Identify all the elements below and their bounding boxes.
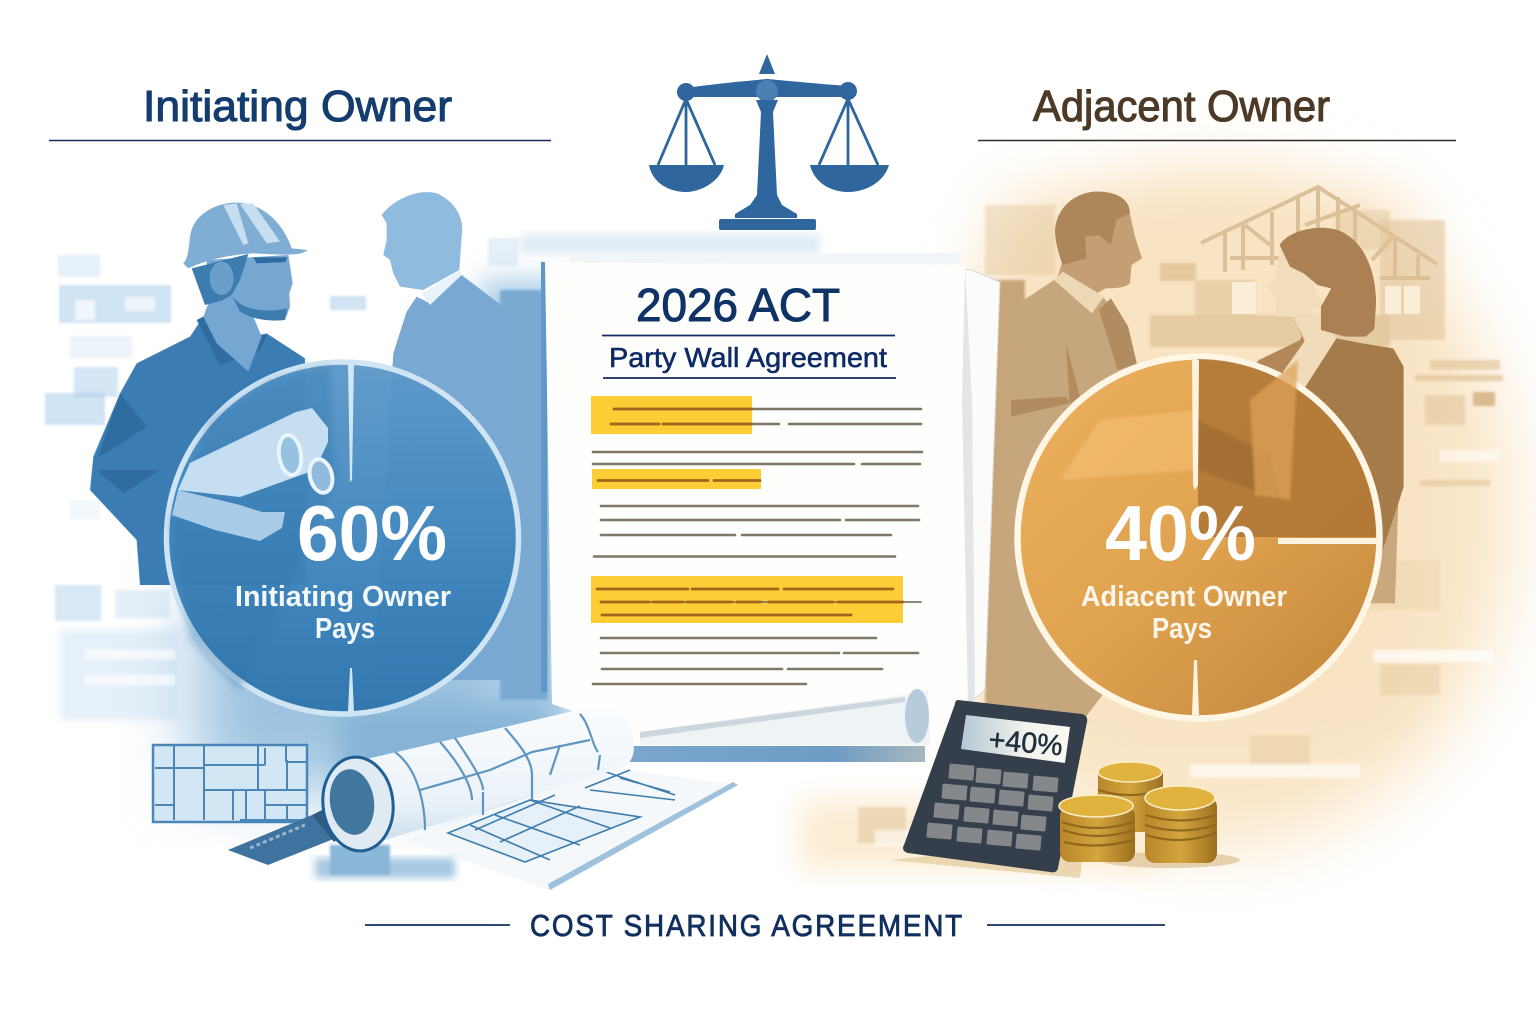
highlight three — [591, 576, 903, 623]
suit jacket — [373, 275, 515, 680]
collar — [1054, 272, 1104, 313]
illustration: drawing sheet under roll — [315, 768, 738, 890]
footer: cost sharing agreement: COST SHARING AGREEMENT — [530, 908, 964, 943]
illustration: man in shirt — [1001, 192, 1173, 720]
roll body — [345, 705, 634, 846]
highlight two — [592, 469, 761, 489]
calculator body — [903, 700, 1087, 872]
front left coin stack — [1059, 795, 1135, 862]
left blue edge — [541, 262, 547, 692]
bottom tick — [1192, 660, 1199, 715]
icon: scales of justice — [649, 54, 889, 230]
heading: adjacent owner: Adjacent Owner — [1033, 82, 1330, 131]
subtitle party wall agreement: Party Wall Agreement — [609, 342, 887, 373]
subtitle rule top — [602, 334, 895, 336]
panel: agreement document — [541, 253, 1000, 762]
back sheets — [930, 266, 1000, 720]
background wash: tan right side — [800, 170, 1515, 870]
highlight one — [591, 396, 752, 434]
pie disc — [1018, 356, 1380, 718]
illustration: gold coin stacks — [1059, 762, 1240, 868]
heading: initiating owner: Initiating Owner — [143, 82, 452, 131]
background blocks: blurred building pixels right — [858, 205, 1503, 846]
front right coin stack — [1145, 786, 1217, 863]
head — [1055, 192, 1142, 295]
worker body — [90, 317, 307, 585]
illustration: house frame truss — [1201, 187, 1437, 278]
label pays: Pays — [1152, 613, 1212, 645]
dark slice through disc — [1198, 359, 1376, 537]
illustration: worker in hard hat — [90, 203, 335, 585]
page shadow below — [620, 746, 925, 762]
illustration: woman in jacket — [1200, 228, 1404, 603]
illustration: floor plan sheet — [153, 745, 307, 822]
top shadow sheet — [570, 253, 960, 264]
label pays: Pays — [315, 613, 375, 645]
neck — [1283, 313, 1336, 387]
background wash: blue left side — [195, 234, 820, 790]
bottom tick — [348, 668, 354, 712]
front page — [545, 262, 975, 745]
label adjacent owner: Adiacent Owner — [1081, 581, 1287, 613]
pie disc — [166, 362, 518, 714]
jacket left shoulder — [1200, 320, 1305, 503]
illustration: man in suit silhouette — [373, 192, 515, 680]
clasped hands through disc — [1060, 410, 1195, 480]
shirt body — [1001, 272, 1173, 720]
worker ear — [210, 262, 234, 295]
label initiating owner pays: Initiating Owner — [235, 581, 451, 613]
lower jacket shadow — [1359, 487, 1398, 603]
body text lines — [593, 409, 922, 684]
calculator shadow — [890, 840, 1085, 878]
illustration: pencil — [228, 806, 342, 865]
illustration: calculator — [890, 700, 1087, 878]
screen — [961, 715, 1070, 763]
subtitle rule bottom — [603, 377, 896, 379]
worker neck and face — [203, 255, 293, 372]
back coin stack — [1098, 762, 1163, 832]
roll hollow — [326, 766, 378, 838]
rolled plans in worker's arms — [172, 408, 336, 541]
right tick — [1278, 538, 1378, 544]
hard hat stripes — [223, 203, 280, 245]
screen readout: +40% — [987, 724, 1064, 762]
rolled plans carried in arms — [180, 408, 335, 500]
worker hair — [192, 254, 248, 305]
background blocks: blurred building pixels left — [45, 238, 518, 720]
40 percent value: 40% — [1105, 489, 1256, 577]
jacket — [1276, 338, 1404, 570]
highlighted text lines — [597, 409, 903, 615]
top tick — [1192, 360, 1199, 490]
roll open end — [318, 754, 398, 854]
shirt collar — [422, 271, 462, 305]
hard hat — [183, 203, 308, 268]
hair — [1055, 192, 1130, 265]
page right shadow — [962, 266, 975, 705]
head — [382, 192, 462, 290]
worker sleeve seen through disc — [170, 365, 335, 690]
illustration: house windows — [1232, 282, 1420, 314]
top tick — [348, 363, 354, 482]
worker brow — [253, 257, 287, 263]
curled lower edge — [640, 689, 930, 745]
coin shadow — [1100, 852, 1240, 868]
panel: 40 percent pie chart — [1018, 356, 1380, 718]
face — [1268, 248, 1321, 317]
keys — [926, 763, 1059, 851]
60 percent value: 60% — [297, 489, 447, 577]
worker beard — [232, 295, 287, 321]
worker shirt folds — [97, 317, 267, 493]
title 2026 ACT: 2026 ACT — [636, 279, 840, 331]
hair — [1280, 228, 1376, 337]
illustration: rolled blueprint — [318, 705, 634, 854]
roll lines — [395, 714, 600, 830]
tie and shadows — [1011, 298, 1137, 417]
panel: 60 percent pie chart — [166, 362, 518, 714]
